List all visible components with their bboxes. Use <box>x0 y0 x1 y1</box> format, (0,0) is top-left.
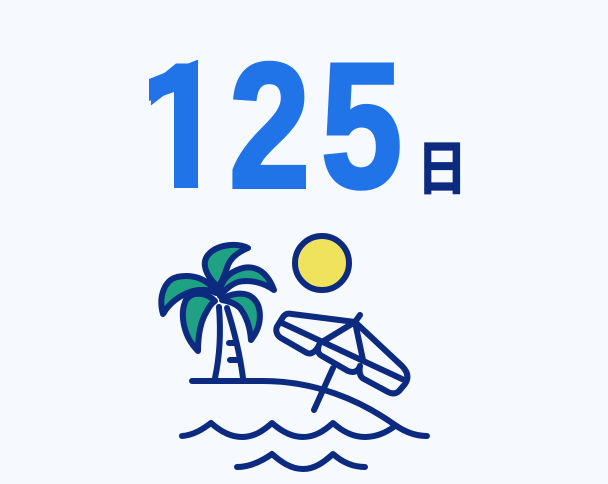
number: 125: 1 <box>142 27 221 226</box>
number: 125: 2 <box>229 27 310 225</box>
canopy ribs <box>282 315 402 379</box>
frond: lower left <box>183 294 215 351</box>
trunk <box>215 307 243 378</box>
icon: palm tree <box>161 245 274 378</box>
waves: upper <box>182 423 395 437</box>
ground and shore <box>192 381 427 436</box>
pole <box>314 368 333 410</box>
icon: sun <box>295 236 349 290</box>
icon: beach umbrella <box>276 314 407 410</box>
frond: left <box>161 276 216 314</box>
frond: right <box>220 267 274 296</box>
number: 125 <box>130 27 402 226</box>
frond: lower right <box>222 294 260 340</box>
canopy <box>276 314 407 393</box>
frond: top <box>205 245 248 287</box>
number: 125: 5 <box>321 27 402 225</box>
waves: lower <box>237 454 365 469</box>
unit: 日: 日 <box>417 138 467 202</box>
